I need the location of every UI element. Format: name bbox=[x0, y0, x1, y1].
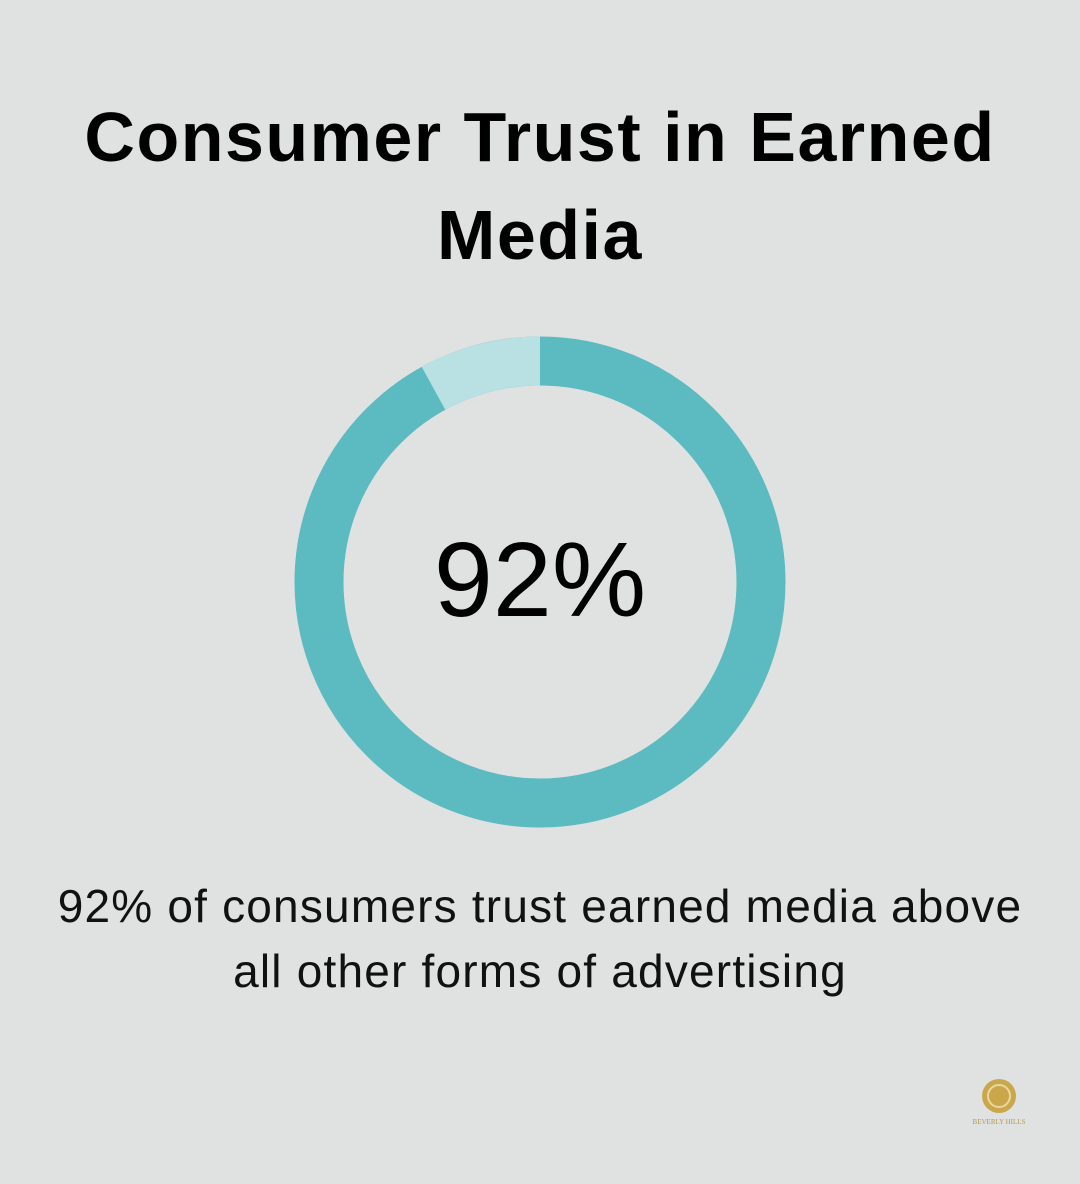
title: Media bbox=[437, 196, 643, 274]
logo bbox=[973, 1079, 1026, 1126]
title: Consumer Trust in Earned bbox=[84, 98, 996, 176]
description text: 92% of consumers trust earned media above bbox=[58, 880, 1022, 932]
title bbox=[84, 98, 996, 274]
description text bbox=[58, 880, 1022, 997]
logo: BEVERLY HILLS bbox=[973, 1118, 1026, 1126]
center value: 92% bbox=[434, 521, 646, 639]
donut ring: 92% bbox=[319, 361, 761, 803]
description text: all other forms of advertising bbox=[233, 945, 847, 997]
